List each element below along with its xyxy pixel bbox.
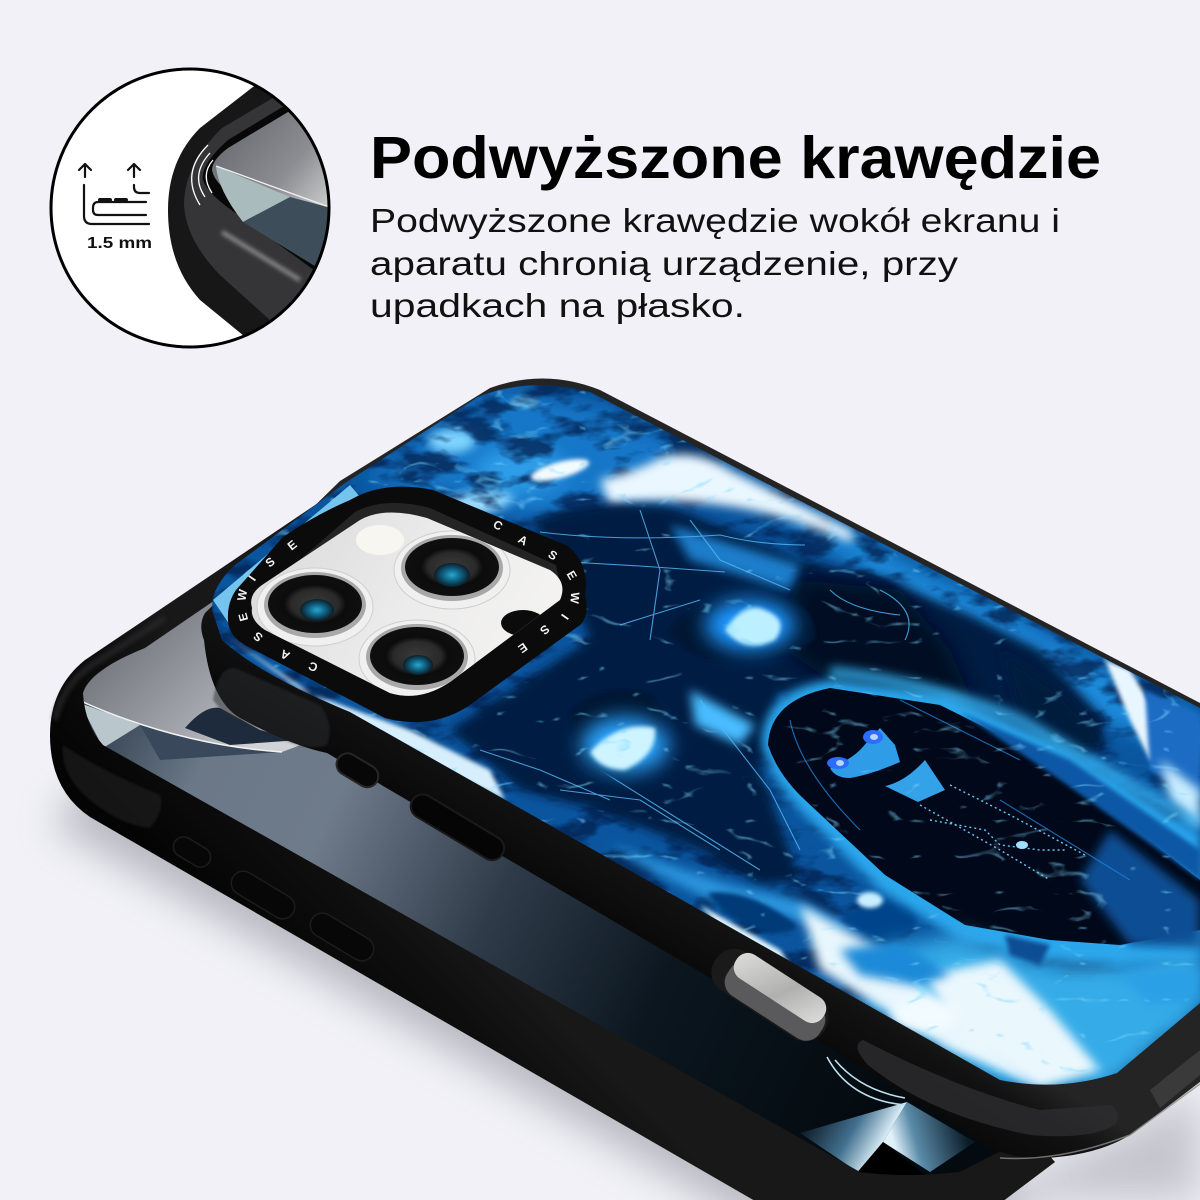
- inset: highlights: [222, 232, 300, 280]
- casewise lettering left: CASEWISE: [234, 537, 320, 675]
- case body: [201, 378, 1200, 1158]
- necklace strands: [920, 785, 1085, 880]
- lower swirl: [610, 845, 880, 940]
- dark mottled texture: [200, 370, 1200, 1090]
- switch button: [332, 749, 382, 791]
- bright bottom right: [700, 905, 1200, 1090]
- pale wedge: [84, 704, 140, 746]
- case rim: [50, 470, 1055, 1200]
- button: action: [170, 833, 214, 871]
- inset: screen: [212, 112, 328, 214]
- side speaker: [1150, 1050, 1200, 1108]
- button: volume down: [306, 909, 378, 965]
- silver highlight lower edge: [1000, 1084, 1200, 1159]
- right splash: [1102, 659, 1153, 762]
- lower phone buttons: [170, 833, 378, 965]
- case art panel: [200, 370, 1200, 1090]
- lens 2: [394, 531, 510, 609]
- inset: measurement label: 1.5 mm: [87, 235, 152, 252]
- phone screen: [83, 602, 1000, 1175]
- description text: aparatu chronią urządzenie, przy: [370, 246, 958, 283]
- heading: Podwyższone krawędzie: [370, 125, 1101, 191]
- chest: [885, 760, 945, 802]
- lens 3: [359, 620, 475, 698]
- description text: [370, 203, 1060, 325]
- camera island: [228, 487, 587, 722]
- lower phone front with bumper case: [50, 504, 1055, 1200]
- lens window: [251, 512, 562, 696]
- white wave: [600, 454, 854, 541]
- circular detail inset: [51, 69, 345, 347]
- rock vein lines: [480, 510, 909, 870]
- description text: upadkach na płasko.: [370, 288, 745, 325]
- glowing sockets: [570, 595, 816, 776]
- inset: edge height icon: [79, 164, 149, 224]
- top glowing marble: [360, 390, 1200, 760]
- case textured corner patch: [63, 745, 161, 828]
- case textured bottom patch: [858, 1040, 1118, 1136]
- microphone hole: [501, 610, 540, 635]
- screen reflection gray: [83, 602, 300, 752]
- silver button with recess: [703, 940, 837, 1050]
- inset: impact arcs: [192, 145, 213, 205]
- upper phone back in case: [200, 370, 1200, 1159]
- lighter inner bevel: [249, 503, 560, 604]
- vein texture: [200, 370, 1200, 1090]
- face: [830, 728, 900, 778]
- inset: case corner: [168, 86, 273, 335]
- button: volume up: [227, 867, 299, 923]
- eyes: [863, 730, 883, 744]
- casewise lettering: CASEWISE: [491, 517, 582, 656]
- description text: Podwyższone krawędzie wokół ekranu i: [370, 203, 1060, 240]
- side long button: [406, 790, 509, 865]
- dark rock mass: [450, 504, 1105, 885]
- drop shadows under phones: [52, 724, 1200, 1200]
- pale sliver near camera: [213, 485, 359, 623]
- flash: [356, 525, 404, 555]
- lit wallpaper corner: [800, 1102, 907, 1172]
- inset: translucent rim: [184, 98, 313, 320]
- hair figure: [762, 672, 1200, 965]
- case textured left patch: [213, 668, 330, 747]
- lens 1: [257, 568, 373, 646]
- camera ring: [228, 487, 587, 722]
